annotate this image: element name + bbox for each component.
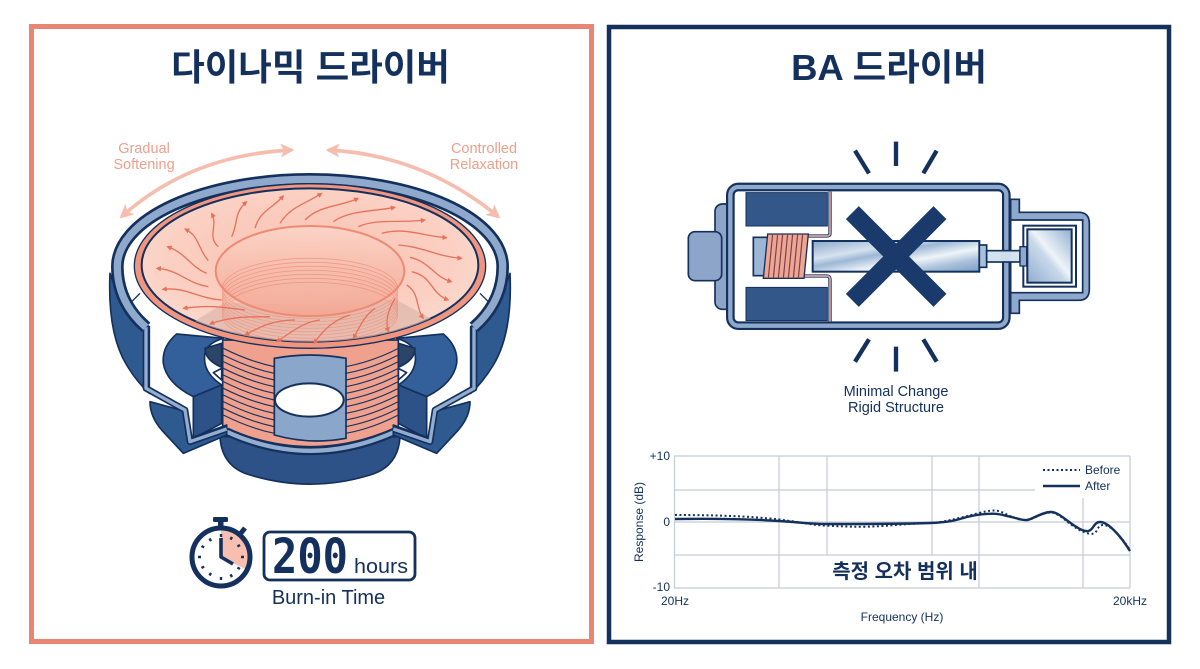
x axis labels: Frequency (Hz) (861, 610, 943, 624)
drive pin (987, 251, 1020, 262)
label: controlled relaxation: Relaxation (450, 157, 518, 173)
chart: frequency response (632, 449, 1147, 624)
window opening (275, 383, 344, 417)
panel: BA driver (609, 27, 1169, 642)
body shell (730, 187, 1006, 326)
magnet ring (163, 334, 457, 438)
y axis labels: 0 (663, 515, 670, 529)
x axis labels (661, 594, 1147, 624)
label: controlled relaxation: Controlled (451, 141, 517, 157)
lower flange left (150, 402, 227, 453)
right housing (1011, 199, 1089, 313)
diaphragm (134, 184, 486, 350)
coil window (274, 355, 346, 441)
readout: 200 hours (264, 529, 415, 585)
icon: stopwatch (192, 517, 250, 586)
flow arrows (157, 193, 462, 343)
caption: minimal change: Rigid Structure (848, 400, 944, 416)
bottom cup (220, 437, 400, 484)
curve: after (675, 512, 1130, 551)
pole piece (803, 192, 830, 322)
y axis labels: +10 (650, 449, 670, 463)
basket shell left (110, 273, 149, 393)
inner cone (216, 226, 404, 316)
cross mark (852, 213, 940, 300)
lower flange right (393, 402, 470, 453)
armature rod (753, 237, 773, 276)
legend: After (1085, 479, 1110, 493)
heading: dynamic driver: 다이나믹 드라이버 (171, 47, 450, 88)
panel: dynamic driver (32, 26, 592, 642)
readout: 200 hours: 200 (272, 529, 348, 585)
readout: 200 hours: hours (354, 556, 408, 578)
flange band (146, 327, 474, 442)
arrow: outward right (328, 150, 498, 217)
outer rim (117, 179, 503, 327)
legend (1043, 463, 1121, 493)
illustration: dynamic driver cutaway (110, 150, 510, 484)
curve: before (675, 511, 1130, 550)
x axis labels: 20kHz (1113, 594, 1147, 608)
rear knob (688, 204, 735, 309)
chart overlay text: 측정 오차 범위 내 (832, 560, 978, 583)
legend: Before (1085, 463, 1121, 477)
caption: minimal change: Minimal Change (844, 384, 948, 400)
heading: BA driver: BA 드라이버 (791, 47, 987, 88)
y axis labels: -10 (653, 580, 670, 594)
voice coil (223, 340, 398, 447)
coil (763, 234, 808, 278)
x axis labels: 20Hz (661, 594, 689, 608)
magnet blocks (746, 193, 827, 321)
grid (674, 456, 1130, 588)
illustration: BA driver cross-section (688, 142, 1089, 372)
label: gradual softening: Gradual (118, 141, 170, 157)
diaphragm box (1020, 226, 1076, 287)
basket shell right (471, 273, 510, 393)
y axis title: Response (dB) (632, 482, 646, 562)
arrow: outward left (122, 150, 292, 217)
vibration ticks (855, 142, 937, 372)
y axis labels (650, 449, 670, 594)
label: gradual softening: Softening (113, 157, 175, 173)
label: burn-in time: Burn-in Time (272, 587, 385, 609)
lower bobbin band (227, 432, 395, 451)
